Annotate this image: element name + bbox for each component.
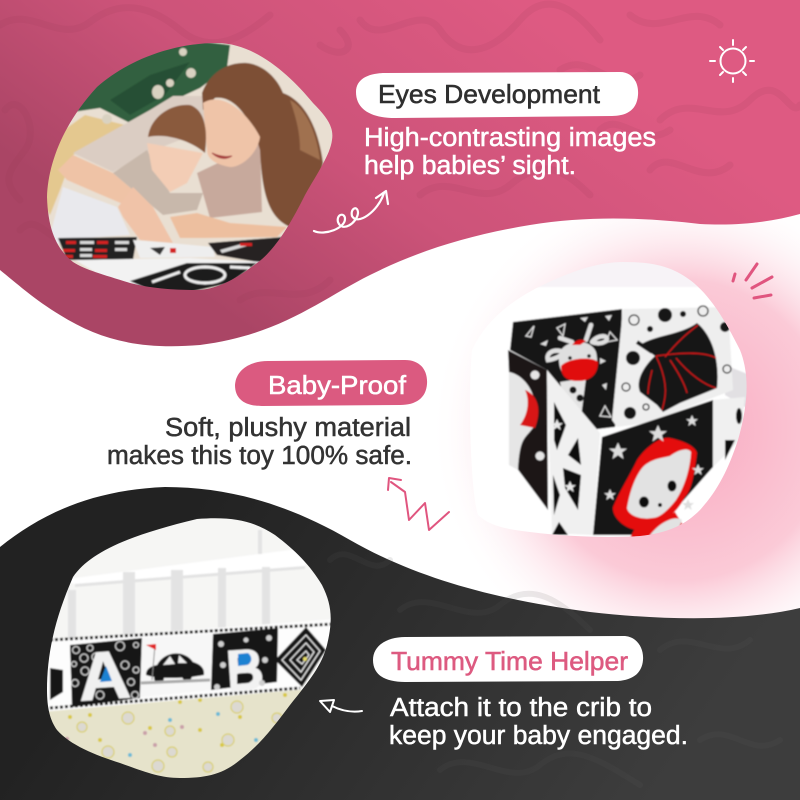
blue letter fill — [238, 653, 251, 666]
elephant — [509, 372, 536, 470]
red scarf — [630, 512, 683, 538]
giraffe panel triangles — [526, 324, 617, 417]
adult hand pointing — [118, 187, 173, 243]
label pill: Baby-Proof — [235, 360, 427, 406]
book marks — [80, 241, 247, 257]
arrow: curly up arrow — [314, 191, 388, 233]
band circles — [72, 642, 139, 699]
photo: mother and baby reading — [40, 40, 340, 295]
band car panel — [140, 634, 213, 697]
right strip — [713, 397, 745, 467]
white spine strip — [547, 370, 600, 535]
book right strip — [208, 237, 283, 263]
sheet flower rings — [77, 701, 282, 772]
letter A: A — [75, 636, 133, 716]
giraffe head — [558, 341, 598, 374]
icon: burst marks — [733, 264, 772, 298]
band B panel — [211, 628, 278, 690]
label pill: Tummy Time Helper: Tummy Time Helper — [391, 646, 628, 676]
grey backdrop corner — [724, 368, 746, 408]
giraffe panel — [510, 309, 622, 430]
pink section squiggle pattern — [0, 4, 800, 300]
text block: eyes development body — [364, 124, 656, 180]
crib rail — [60, 548, 305, 584]
lion paw — [650, 518, 682, 538]
dark section squiggle pattern — [330, 554, 780, 785]
second arm — [170, 213, 287, 238]
panel: pink top section — [0, 0, 800, 346]
band diamond — [275, 627, 326, 687]
text block: tummy time body — [389, 694, 688, 750]
text block: baby-proof body: Soft, plushy material — [165, 414, 411, 442]
woman's arm — [58, 155, 133, 207]
book black strip — [58, 237, 137, 260]
leaf panel — [612, 307, 733, 427]
photo backdrop — [560, 262, 698, 537]
baby's shirt — [113, 150, 203, 215]
band left black shape — [50, 668, 63, 700]
car — [141, 644, 210, 683]
baby's face — [147, 143, 203, 192]
band A panel — [70, 638, 142, 707]
text block: tummy time body: Attach it to the crib to — [390, 694, 652, 722]
panel: dark bottom section — [0, 487, 800, 800]
icon: sun — [710, 40, 754, 82]
book white centre — [133, 240, 215, 258]
green tree — [73, 40, 230, 123]
arrow: left pointing — [320, 700, 362, 712]
label pill: Eyes Development: Eyes Development — [378, 79, 601, 109]
text block: baby-proof body: makes this toy 100% safe. — [107, 442, 412, 470]
text block: tummy time body: keep your baby engaged. — [389, 722, 688, 750]
band bottom checker edge — [50, 688, 300, 708]
woman's face — [203, 100, 260, 167]
label pill: Baby-Proof: Baby-Proof — [268, 370, 407, 400]
woman's hair — [202, 63, 323, 227]
lion mane — [613, 438, 697, 530]
sheet dots — [68, 693, 287, 747]
fabric band — [40, 619, 335, 712]
lion face — [627, 449, 691, 518]
photo: fabric cube toy — [470, 262, 746, 537]
leaf panel dots — [624, 308, 730, 419]
crib backdrop — [40, 515, 340, 785]
left side panel — [508, 350, 548, 510]
giraffe ears and horns — [548, 325, 607, 360]
lower white page — [76, 258, 260, 286]
mattress sheet — [40, 690, 340, 785]
strip black shapes — [552, 402, 581, 535]
photo: crib with ABC band — [40, 515, 340, 785]
lower black page — [130, 263, 257, 292]
label pill: Tummy Time Helper — [373, 636, 643, 682]
baby's hair — [148, 105, 206, 153]
band top checker edge — [50, 624, 334, 640]
black letter counter — [237, 673, 252, 684]
letter B: B — [225, 637, 265, 702]
text block: eyes development body: help babies’ sight. — [364, 152, 576, 180]
front lion panel — [593, 400, 713, 535]
woman's sweater chest — [197, 143, 262, 218]
blue letter fill — [100, 666, 112, 682]
text block: eyes development body: High-contrasting images — [364, 124, 656, 152]
woman's mouth — [212, 153, 232, 158]
giraffe eyes — [568, 354, 591, 360]
black leaf — [639, 323, 718, 412]
text block: baby-proof body — [107, 414, 412, 470]
white trousers — [50, 187, 130, 245]
pink glow behind toy photo — [420, 170, 800, 670]
woman's sweater sleeve — [73, 96, 205, 172]
woman's lighter hair strand — [290, 100, 320, 160]
arrow: zigzag — [388, 478, 449, 530]
warm floor — [40, 115, 125, 215]
crib bars shading — [68, 530, 305, 650]
lion panel stars — [604, 415, 704, 510]
giraffe neck — [559, 378, 588, 412]
photo backdrop — [40, 40, 340, 295]
tree lights — [102, 48, 196, 124]
label pill: Eyes Development — [356, 72, 638, 118]
band stars — [214, 635, 272, 690]
